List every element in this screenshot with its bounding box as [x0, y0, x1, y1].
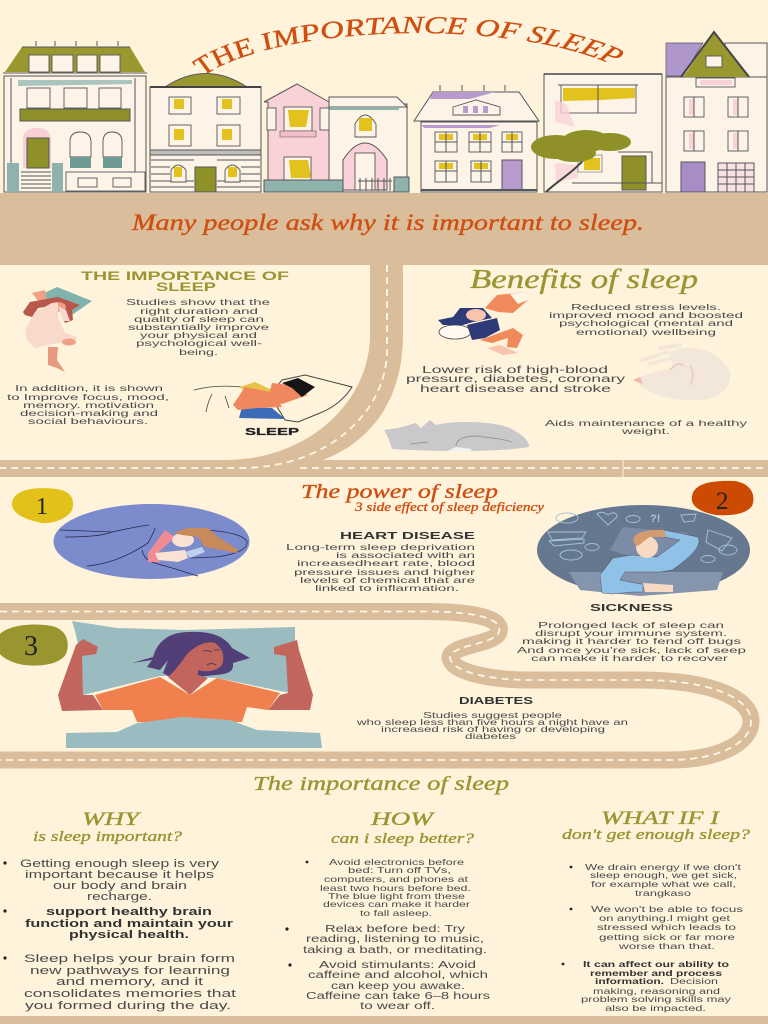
text: heart disease: linked to inflarmation.	[315, 583, 459, 593]
text: diabetes	[355, 695, 629, 741]
bullet list: Sleep helps your brain form	[24, 953, 235, 965]
street ground band	[0, 193, 768, 265]
text: heart disease: increasedheart rate, blood	[297, 558, 475, 568]
bullet list: our body and brain	[53, 880, 187, 892]
text: heart disease: is associated with an	[336, 550, 475, 560]
bullet list: The blue light from these	[328, 892, 466, 901]
bullet list: Avoid electronics before	[329, 858, 465, 867]
text: reduced stress	[549, 302, 743, 337]
bullet list: Caffeine can take 6–8 hours	[306, 991, 490, 1002]
text: in addition	[7, 383, 169, 426]
text: heart disease: HEART DISEASE	[340, 530, 475, 542]
bullet list: new pathways for learning	[30, 965, 230, 977]
text: aids maintenance	[545, 418, 748, 436]
bullet list: support healthy brain	[46, 906, 212, 918]
text: lower risk: heart disease and stroke	[420, 383, 611, 395]
icon: person sleeping with pillow	[194, 375, 352, 422]
text: in addition: social behaviours.	[28, 416, 148, 426]
illustration: woman holding pillow over head	[58, 621, 322, 748]
bullet list: also be impacted.	[605, 1003, 706, 1013]
bullet list: you formed during the day.	[25, 1000, 231, 1012]
bullet list: information.	[595, 976, 664, 986]
panel: the power of sleep	[0, 481, 753, 748]
bullet list: trangkaso	[635, 888, 691, 898]
bullet list: sleep enough, we get sick,	[590, 870, 737, 880]
bullet list: bed: Turn off TVs,	[348, 866, 451, 875]
bullet list: can keep you awake.	[331, 981, 465, 992]
bullet list: Avoid stimulants: Avoid	[319, 960, 476, 971]
text: diabetes: DIABETES	[459, 695, 533, 707]
bullet list: on anything.I might get	[599, 913, 731, 923]
heading: The power of sleep	[301, 481, 498, 503]
text: reduced stress: emotional) wellbeing	[576, 327, 716, 337]
column heading: WHY	[82, 809, 142, 830]
icon: girl sleeping on pillow	[23, 287, 92, 372]
bullet list: worse than that.	[617, 941, 715, 951]
text: studies show: psychological well-	[136, 338, 262, 348]
icon: white cat	[633, 345, 730, 400]
bullet list: We drain energy if we don't	[585, 862, 742, 872]
bullet list: and memory, and it	[56, 976, 203, 988]
text: heart disease: pressure issues and higher	[294, 567, 475, 577]
bullet list: devices can make it harder	[323, 900, 470, 909]
badge 2: 2	[716, 488, 728, 515]
text: aids maintenance: weight.	[620, 426, 670, 436]
text: sickness: And once you're sick, lack of seep	[517, 645, 746, 655]
bottom band	[0, 1016, 768, 1024]
panel: the importance of sleep, three columns	[3, 773, 751, 1013]
text: studies show: Studies show that the	[126, 297, 270, 307]
column heading	[331, 809, 475, 847]
bullet list: least two hours before bed.	[320, 884, 471, 893]
bullet list: Getting enough sleep is very	[20, 858, 220, 870]
bullet list: for example what we call,	[591, 879, 736, 889]
text: sickness: SICKNESS	[590, 602, 673, 614]
text: heart disease: levels of chemical that are	[300, 575, 475, 585]
illustration: woman on phone in bed	[54, 504, 250, 579]
house 6	[666, 32, 767, 192]
bullet list: physical health.	[69, 929, 189, 941]
text: in addition: decision-making and	[20, 408, 158, 418]
column heading: WHAT IF I	[601, 808, 721, 829]
illustration: worried man in bed	[537, 505, 750, 596]
heading: Benefits of sleep	[470, 264, 698, 294]
bullet list	[562, 862, 743, 1013]
road: winding	[0, 611, 751, 760]
illustration: row of houses	[3, 32, 767, 192]
heading: SLEEP	[156, 282, 217, 294]
text: lower risk: Lower risk of high-blood	[422, 364, 608, 376]
bullet list: stressed which leads to	[597, 922, 736, 932]
bullet list: remember and process	[590, 968, 722, 978]
text: reduced stress: improved mood and boosted	[549, 310, 743, 320]
bullet list: We won't be able to focus	[591, 904, 743, 914]
house 3	[264, 84, 409, 192]
illustration: worried man in bed: ?!	[650, 513, 660, 525]
text: diabetes: increased risk of having or developing	[381, 725, 606, 734]
text: diabetes: diabetes	[465, 732, 516, 741]
text: studies show: substantially improve	[128, 322, 269, 332]
text: aids maintenance: Aids maintenance of a healthy	[545, 418, 748, 428]
text: lower risk: pressure, diabetes, coronary	[406, 373, 626, 385]
column: how	[285, 809, 490, 1012]
text: diabetes: who sleep less than five hours a night have an	[355, 718, 629, 727]
bullet list: function and maintain your	[25, 918, 234, 930]
column heading	[33, 809, 183, 845]
text: lower risk	[406, 364, 626, 395]
bullet list: making, reasoning and	[593, 986, 720, 996]
column: what if	[562, 808, 751, 1013]
text: sickness: disrupt your immune system.	[535, 628, 727, 638]
text: heart disease	[286, 530, 475, 593]
bullet list: Decision	[670, 976, 718, 986]
badge 1	[12, 488, 73, 523]
road: vertical curve to horizontal	[0, 265, 768, 477]
house 5 and tree	[531, 74, 662, 192]
heading	[81, 271, 289, 294]
text: studies show	[126, 297, 270, 357]
icon: gray cat	[384, 420, 529, 452]
column heading	[562, 808, 751, 843]
bullet list: problem solving skills may	[581, 994, 732, 1004]
column heading: can i sleep better?	[331, 831, 475, 847]
bullet list: consolidates memories that	[24, 988, 236, 1000]
text: studies show: quality of sleep can	[134, 314, 264, 324]
badge 1: 1	[36, 494, 48, 520]
text: in addition: memory. motivation	[23, 400, 154, 410]
bullet list: taking a bath, or meditating.	[303, 945, 487, 956]
bullet list	[3, 858, 236, 1012]
subheading: 3 side effect of sleep deficiency	[354, 500, 545, 514]
badge 3	[0, 625, 68, 666]
bullet list: important because it helps	[25, 869, 215, 881]
bullet list: recharge.	[87, 891, 152, 903]
house 4	[414, 85, 539, 192]
label: sleep: SLEEP	[245, 427, 300, 438]
icon: girl hugging pillow	[438, 292, 528, 355]
bullet list: It can affect our ability to	[583, 959, 729, 969]
heading: THE IMPORTANCE OF	[81, 271, 289, 283]
badge 3: 3	[24, 631, 38, 662]
bullet list: getting sick or far more	[599, 932, 735, 942]
bullet list	[285, 858, 490, 1012]
text: in addition: In addition, it is shown	[15, 383, 163, 393]
text: diabetes: Studies suggest people	[423, 711, 563, 720]
column heading: is sleep important?	[33, 829, 183, 845]
text: reduced stress: Reduced stress levels.	[571, 302, 721, 312]
column heading: don't get enough sleep?	[562, 827, 751, 843]
bullet list: computers, and phones at	[324, 875, 469, 884]
column: why	[3, 809, 236, 1012]
text: heart disease: Long-term sleep deprivation	[286, 542, 475, 552]
text: studies show: your physical and	[140, 330, 257, 340]
bullet list: to wear off.	[360, 1001, 435, 1012]
badge 2	[692, 481, 753, 515]
text: sickness: can make it harder to recover	[531, 653, 728, 663]
text: studies show: right duration and	[140, 306, 258, 316]
subtitle: Many people ask why it is important to sleep.	[131, 210, 644, 235]
house 2	[150, 74, 261, 192]
bullet list: caffeine and alcohol, which	[308, 970, 488, 981]
text: sickness: Prolonged lack of sleep can	[538, 620, 724, 630]
bullet list: Relax before bed: Try	[325, 924, 465, 935]
panel: the importance of sleep	[7, 271, 352, 438]
text: in addition: to Improve focus, mood,	[7, 392, 169, 402]
panel: benefits of sleep	[384, 264, 748, 452]
title: THE IMPORTANCE OF SLEEP	[192, 16, 624, 74]
house 1	[3, 41, 147, 192]
text: studies show: being.	[179, 347, 218, 357]
text: sickness	[517, 602, 746, 663]
text: sickness: making it harder to fend off bugs	[522, 636, 741, 646]
bullet list: to fall asleep.	[360, 909, 432, 918]
heading: The importance of sleep	[253, 773, 509, 795]
column heading: HOW	[370, 809, 436, 830]
bullet list: reading, listening to music,	[306, 934, 484, 945]
text: reduced stress: psychological (mental and	[559, 318, 733, 328]
